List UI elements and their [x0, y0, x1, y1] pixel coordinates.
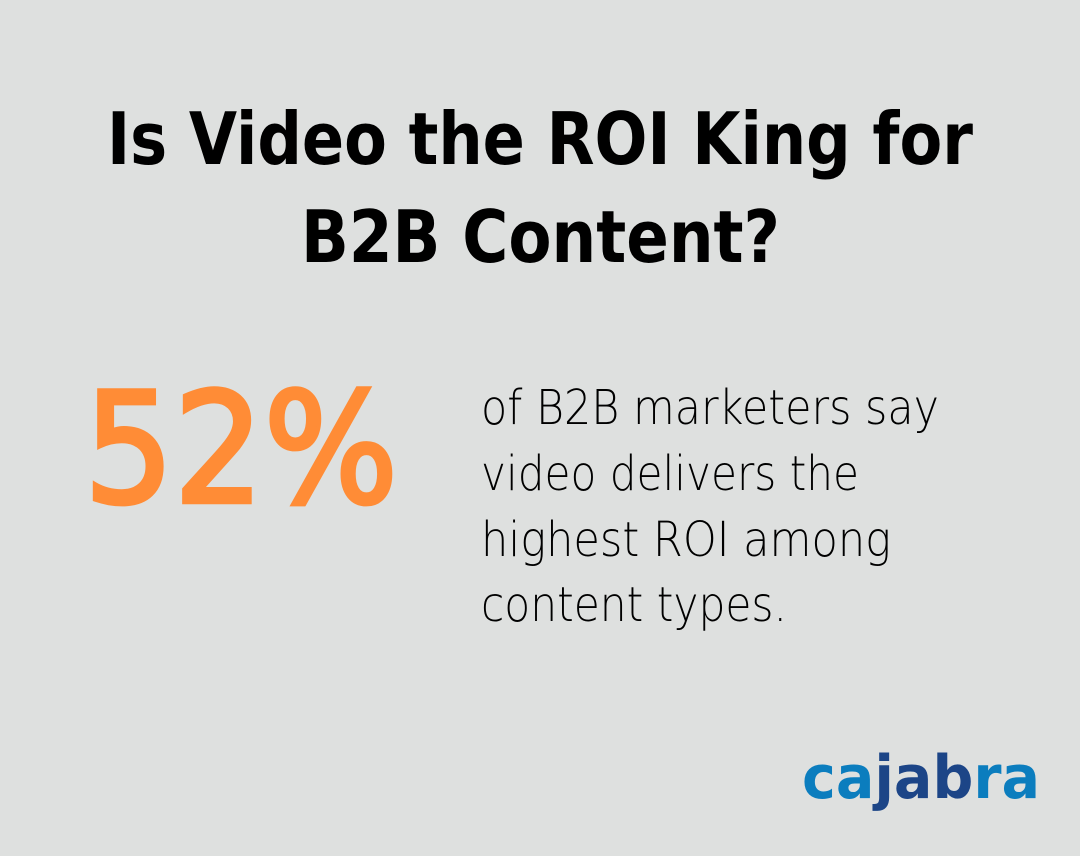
title: Is Video the ROI King for: [107, 97, 973, 181]
statistic description: highest ROI among: [481, 512, 891, 568]
title: B2B Content?: [301, 195, 780, 279]
statistic description: video delivers the: [481, 446, 859, 502]
statistic description: of B2B marketers say: [481, 380, 939, 436]
statistic description: [481, 380, 939, 633]
statistic description: content types.: [481, 577, 787, 633]
title: [107, 97, 973, 279]
logo: cajabra: cajabra: [802, 743, 1040, 813]
statistic: 52%: 52%: [84, 361, 398, 539]
